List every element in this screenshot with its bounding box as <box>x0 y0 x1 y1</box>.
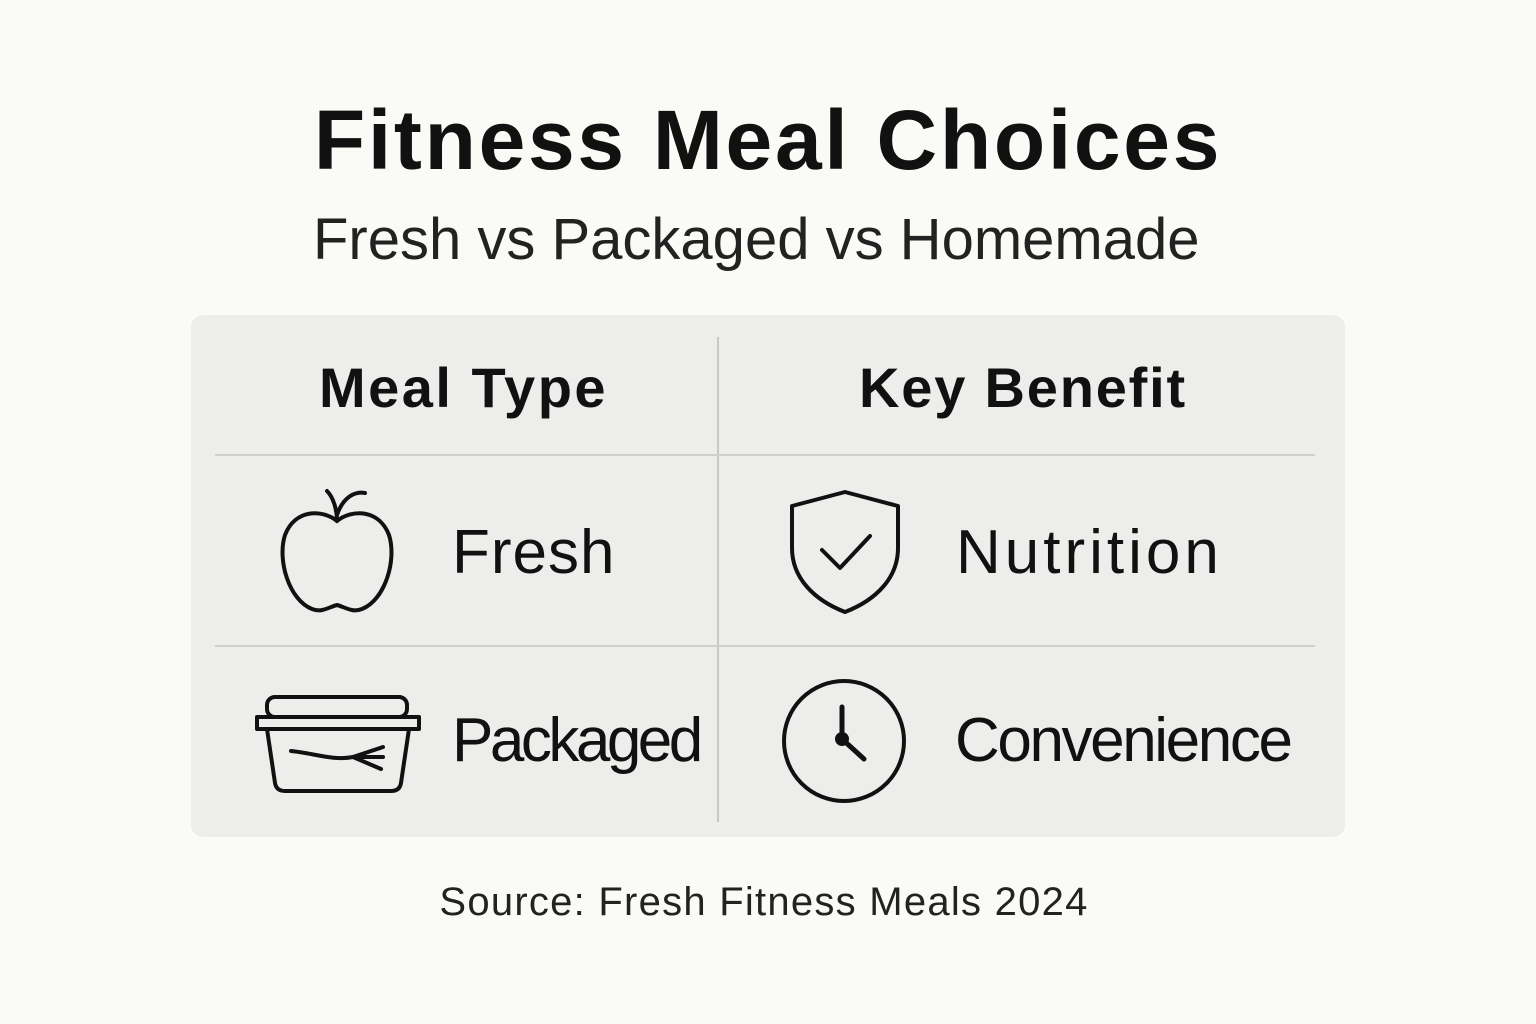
text: Fresh: Fresh <box>452 518 615 587</box>
text: Nutrition: Nutrition <box>956 518 1223 587</box>
subtitle: Fresh vs Packaged vs Homemade <box>313 207 1199 272</box>
icon: shield check <box>790 490 900 614</box>
panel: comparison table <box>191 315 1345 837</box>
icon: apple <box>280 488 394 612</box>
icon: clock <box>782 679 906 803</box>
icon: food container <box>255 695 421 793</box>
header: Meal Type: Meal Type <box>319 356 608 419</box>
text: Convenience: Convenience <box>955 706 1291 775</box>
source: Source: Fresh Fitness Meals 2024 <box>439 880 1089 924</box>
header: Key Benefit: Key Benefit <box>859 356 1187 419</box>
title: Fitness Meal Choices <box>314 93 1222 187</box>
text: Packaged: Packaged <box>452 706 700 775</box>
